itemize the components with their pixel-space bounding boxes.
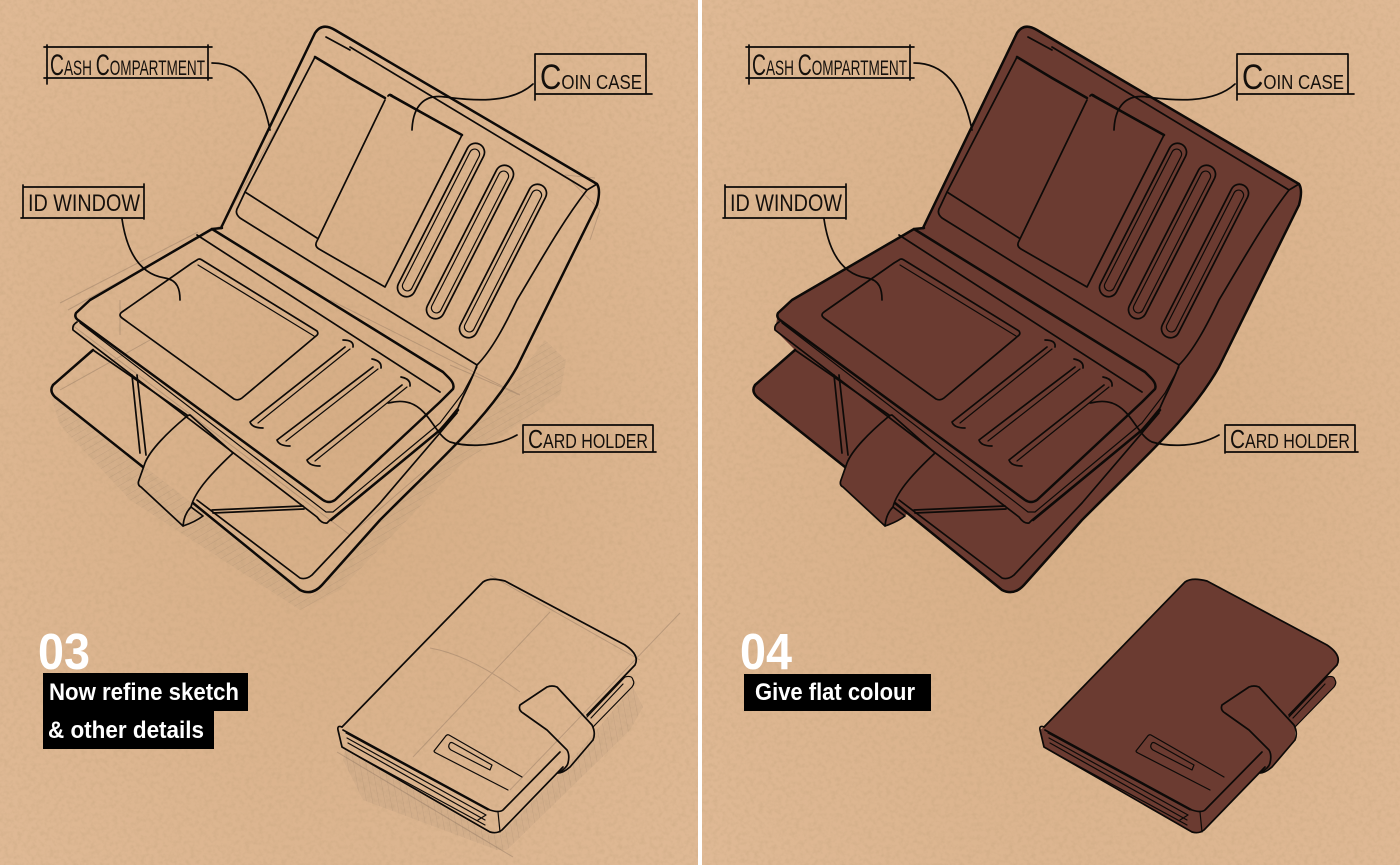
main wallet flat colour fill (753, 27, 1301, 592)
caption: now refine sketch (43, 673, 248, 749)
label: card holder (1090, 401, 1358, 454)
label: card holder (388, 401, 656, 454)
small closed wallet line drawing (1040, 579, 1338, 833)
label: coin case: COIN CASE (1242, 58, 1344, 97)
label: card holder: CARD HOLDER (528, 424, 648, 454)
caption: now refine sketch: Now refine sketch (49, 679, 239, 706)
main open wallet line drawing (753, 27, 1301, 592)
label: coin case: COIN CASE (540, 58, 642, 97)
label: id window (21, 184, 180, 300)
small wallet flat colour fill (1040, 579, 1338, 833)
label: id window (723, 184, 882, 300)
caption: give flat colour: Give flat colour (755, 679, 915, 706)
label: coin case (412, 54, 652, 130)
caption: now refine sketch: & other details (48, 717, 204, 744)
label: card holder: CARD HOLDER (1230, 424, 1350, 454)
label: cash compartment: CASH COMPARTMENT (50, 49, 205, 82)
label: cash compartment (746, 45, 972, 130)
main open wallet line drawing (51, 27, 599, 592)
caption: give flat colour (744, 674, 931, 711)
label: coin case (1114, 54, 1354, 130)
label: cash compartment (44, 45, 270, 130)
panel: step 03 refine sketch (0, 0, 698, 865)
wallet shadow pencil hatching (52, 105, 680, 857)
label: id window: ID WINDOW (730, 190, 842, 217)
small closed wallet line drawing (338, 579, 636, 833)
label: id window: ID WINDOW (28, 190, 140, 217)
step number 04: 04 (740, 623, 793, 680)
panel: step 04 flat colour (702, 0, 1400, 865)
step number 03: 03 (38, 623, 90, 680)
label: cash compartment: CASH COMPARTMENT (752, 49, 907, 82)
